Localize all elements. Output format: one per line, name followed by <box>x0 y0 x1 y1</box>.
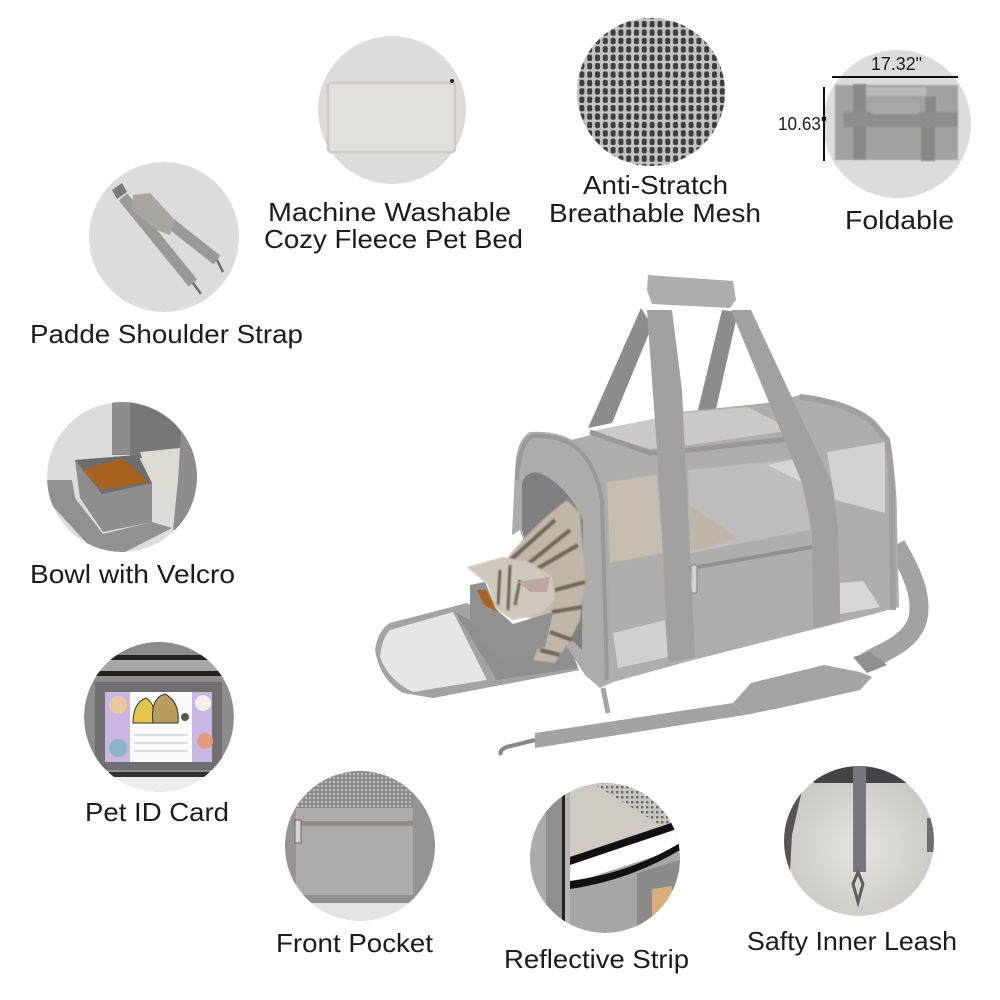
panel: front pocket <box>285 771 437 921</box>
top zipper band <box>590 432 797 453</box>
lower left mesh <box>613 620 668 668</box>
handle strap right <box>731 310 840 628</box>
heading: breathable mesh <box>549 170 761 228</box>
carrier interior <box>130 402 194 458</box>
long shoulder strap behind bag <box>866 545 919 662</box>
cat and dog logo <box>133 694 189 723</box>
strap lower section <box>535 703 745 748</box>
door flap <box>375 603 580 698</box>
top mesh panel <box>592 407 793 449</box>
bottom seam <box>304 895 416 903</box>
heading: foldable: Foldable <box>845 205 954 235</box>
right edge zip band <box>800 397 893 610</box>
floor flap <box>47 480 172 552</box>
heading: reflective strip: Reflective Strip <box>504 944 689 974</box>
card lines <box>134 735 188 751</box>
zipper pull <box>691 565 697 593</box>
kitten head <box>467 557 555 620</box>
door opening <box>522 472 583 650</box>
lower right mesh <box>840 581 880 614</box>
mesh area <box>570 783 672 857</box>
dark top <box>810 766 910 783</box>
heading: front pocket: Front Pocket <box>276 928 434 958</box>
zipper pull <box>295 820 301 843</box>
panel: foldable dimensions <box>778 50 971 198</box>
paws <box>109 696 127 714</box>
pocket zipper <box>299 821 413 826</box>
bowl kibble <box>477 590 498 612</box>
carrier body <box>571 395 899 688</box>
strap clips <box>193 260 223 294</box>
flap mesh pad <box>380 612 487 692</box>
handle strap left <box>647 310 695 663</box>
zipper <box>530 812 546 904</box>
right window <box>827 442 885 513</box>
panel: fleece pet bed <box>318 36 466 184</box>
panel: reflective strip <box>530 783 680 933</box>
white card panel <box>130 692 192 762</box>
shoulder pad <box>132 193 175 235</box>
handle pad <box>647 275 736 308</box>
kitten rear behind mesh <box>688 505 738 552</box>
card sleeve <box>95 682 222 770</box>
heading: inner leash: Safty Inner Leash <box>747 926 957 956</box>
middle mesh window <box>688 458 810 553</box>
panel: safety inner leash <box>784 766 935 916</box>
width dimension line <box>832 76 958 78</box>
strap pad <box>733 665 872 715</box>
kibble <box>82 458 148 490</box>
purple card <box>105 692 212 762</box>
heading: fleece pet bed: Machine Washable <box>268 197 511 227</box>
front zipper tail <box>603 688 608 713</box>
height label: 10.63" <box>778 114 827 134</box>
bowl <box>470 582 553 660</box>
heading: pet ID: Pet ID Card <box>85 797 229 827</box>
panel: padded shoulder strap <box>89 162 239 312</box>
kitten ear <box>518 577 550 592</box>
strap hook <box>501 740 535 755</box>
panel: pet ID card <box>84 642 235 793</box>
mesh top <box>285 771 415 808</box>
strap webbing <box>123 197 217 283</box>
heading: breathable mesh: Breathable Mesh <box>549 198 761 228</box>
right dark edge <box>927 818 934 852</box>
top mesh and black bands <box>116 642 202 655</box>
door frame <box>173 432 197 530</box>
leash clip <box>853 872 863 902</box>
bowl <box>75 455 152 532</box>
kitten stripes <box>505 520 585 655</box>
heading: fleece pet bed <box>264 197 523 254</box>
reflective band <box>570 826 679 881</box>
width label: 17.32" <box>871 54 922 74</box>
left mesh window <box>607 475 663 563</box>
strap buckle <box>112 183 127 199</box>
strap buckle <box>853 652 887 673</box>
heading: breathable mesh: Anti-Stratch <box>583 170 728 200</box>
front frame <box>512 432 611 688</box>
cushion <box>140 448 180 458</box>
flap inner strip <box>455 612 578 680</box>
main carrier with kitten <box>375 275 919 755</box>
height dimension line <box>823 87 825 161</box>
kitten body <box>488 500 585 663</box>
panel: breathable mesh <box>577 18 725 166</box>
left dark edge <box>784 790 802 870</box>
panel: bowl with velcro <box>47 400 200 552</box>
frame zipper <box>517 436 607 680</box>
fleece bed pad <box>328 83 455 152</box>
leash strap <box>853 766 866 872</box>
heading: fleece pet bed: Cozy Fleece Pet Bed <box>264 224 523 254</box>
back handles <box>588 308 738 428</box>
folded carrier <box>835 84 958 161</box>
heading: bowl: Bowl with Velcro <box>30 559 235 589</box>
pocket zipper <box>698 547 812 567</box>
kitten forehead stripes <box>498 565 520 610</box>
heading: shoulder strap: Padde Shoulder Strap <box>30 319 303 349</box>
side strap <box>413 793 435 899</box>
ID sleeve corner <box>637 860 680 933</box>
